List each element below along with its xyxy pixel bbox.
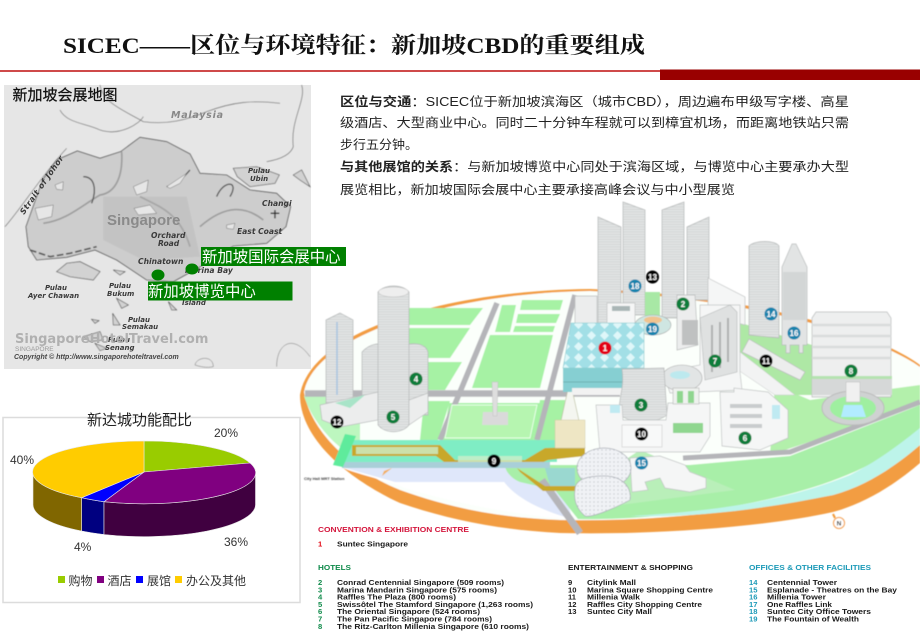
legend: hotels <box>318 563 534 631</box>
map: place names: Ubin <box>250 175 268 183</box>
legend: hotels: Marina Mandarin Singapore (575 rooms) <box>337 586 498 594</box>
marker: Suntec dot <box>186 264 198 274</box>
legend: hotels: 5 <box>318 600 323 609</box>
number markers: 8 <box>849 367 854 376</box>
legend: hotels: 6 <box>318 607 322 616</box>
tower 14 and 16 <box>749 242 807 353</box>
number markers: 16 <box>790 329 799 338</box>
map: place names: Senang <box>105 344 134 352</box>
building 8 <box>812 312 892 425</box>
legend: offices and other facilities: OFFICES & OTHER FACILITIES <box>749 563 871 572</box>
number markers: 11 <box>762 357 771 366</box>
legend: offices and other facilities: 17 <box>749 600 757 609</box>
legend: hotels: 8 <box>318 622 322 631</box>
building 2 and 7 <box>662 295 742 393</box>
data labels <box>10 426 248 554</box>
map: island shapes <box>5 85 310 367</box>
building 1 Suntec <box>563 323 644 395</box>
map: place names: East Coast <box>237 227 283 236</box>
text block: location and relation: 步行五分钟。 <box>340 137 418 152</box>
map: place names: Road <box>158 239 180 248</box>
title: SICEC——区位与环境特征：新加坡CBD的重要组成 <box>63 33 645 58</box>
legend: entertainment and shopping: 13 <box>568 607 576 616</box>
callout: Singapore Expo: 新加坡博览中心 <box>148 282 256 300</box>
legend: hotels: Swissôtel The Stamford Singapore (1,263 rooms) <box>337 600 534 609</box>
3D pie <box>33 441 256 537</box>
legend: hotels: The Ritz-Carlton Millenia Singapore (610 rooms) <box>337 622 530 631</box>
MRT label: City Hall MRT Station <box>304 476 345 481</box>
legend: 展馆 <box>147 573 171 588</box>
map: place names: Chinatown <box>138 257 183 266</box>
number markers <box>330 270 858 470</box>
pyramid glasshouse <box>555 380 585 448</box>
site illustration <box>300 202 920 533</box>
roads <box>305 295 920 533</box>
legend: entertainment and shopping: 12 <box>568 600 576 609</box>
legend: entertainment and shopping: ENTERTAINMENT & SHOPPING <box>568 563 693 572</box>
legend: 办公及其他 <box>186 573 246 588</box>
legend: entertainment and shopping: Citylink Mall <box>587 578 636 587</box>
map: place names: Strait of Johor <box>18 153 66 216</box>
legend: hotels: The Pan Pacific Singapore (784 rooms) <box>337 614 493 624</box>
map: place names: Pulau <box>45 284 67 292</box>
map: place names <box>14 110 292 361</box>
number markers: 19 <box>648 325 657 334</box>
legend: hotels: 7 <box>318 614 322 624</box>
legend: offices and other facilities: Suntec City Office Towers <box>767 607 871 616</box>
number markers: 15 <box>637 459 646 468</box>
number markers: 3 <box>639 401 644 410</box>
legend: offices and other facilities: 18 <box>749 607 757 616</box>
legend <box>58 573 246 588</box>
number markers: 6 <box>743 434 748 443</box>
legend: hotels: Raffles The Plaza (800 rooms) <box>337 592 457 602</box>
number markers: 10 <box>637 430 646 439</box>
map: place names: Pulau <box>108 336 130 344</box>
text block: location and relation <box>340 94 849 197</box>
number markers: 1 <box>603 344 608 353</box>
building 12 <box>320 313 378 427</box>
map: place names: Malaysia <box>171 110 223 121</box>
legend: offices and other facilities: 16 <box>749 592 757 602</box>
number markers: 9 <box>492 457 497 466</box>
legend: convention centre: CONVENTION & EXHIBITION CENTRE <box>318 525 469 534</box>
building 3 <box>619 368 667 422</box>
map: place names: Copyright © http://www.singaporehoteltravel.com <box>14 353 179 361</box>
legend: hotels: HOTELS <box>318 563 351 572</box>
text block: location and relation: 展览相比，新加坡国际会展中心主要承接高峰会议与中小型展览 <box>340 182 735 197</box>
number markers: 18 <box>631 282 640 291</box>
map heading: 新加坡会展地图 <box>12 87 118 104</box>
data labels: 40% <box>10 453 34 467</box>
legend: entertainment and shopping: Raffles City Shopping Centre <box>587 600 702 609</box>
callout: Singapore Expo <box>148 282 292 300</box>
number markers: 5 <box>391 413 396 422</box>
legend: entertainment and shopping: 11 <box>568 592 577 602</box>
building 4 <box>362 344 428 415</box>
panel: Singapore map <box>4 85 346 369</box>
walkway 9 <box>333 434 585 491</box>
legend: hotels: 3 <box>318 586 322 594</box>
legend: offices and other facilities: Centennial Tower <box>767 578 837 587</box>
legend: convention centre <box>318 525 469 548</box>
building 11 <box>738 339 805 395</box>
legend: offices and other facilities: The Fountain of Wealth <box>767 614 859 624</box>
legend: entertainment and shopping: 9 <box>568 578 572 587</box>
map: place names: Pulau <box>128 316 150 324</box>
panel: pie chart <box>3 412 300 602</box>
map: place names: Bukum <box>107 290 134 298</box>
legend: hotels: Conrad Centennial Singapore (509 rooms) <box>337 578 505 587</box>
legend: offices and other facilities: One Raffles Link <box>767 600 833 609</box>
legend: offices and other facilities <box>749 563 898 624</box>
map: place names: SingaporeHotelTravel.com <box>15 332 208 347</box>
number markers: 12 <box>333 418 342 427</box>
map: place names: Semakau <box>122 323 158 331</box>
map: place names: Orchard <box>151 231 186 240</box>
legend: hotels: The Oriental Singapore (524 rooms) <box>337 607 481 616</box>
tower group 18 <box>575 202 745 335</box>
text block: location and relation: 级酒店、大型商业中心。同时二十分钟车程就可以到樟宜机场，而距离地铁站只需 <box>340 115 849 130</box>
north arrow: N <box>837 520 842 528</box>
map: place names: Marina Bay <box>185 266 234 275</box>
legend: convention centre: Suntec Singapore <box>337 540 408 548</box>
legend: entertainment and shopping: Millenia Walk <box>587 592 641 602</box>
text block: location and relation: 区位与交通 ：SICEC位于新加坡滨海区（城市CBD），周边遍布甲级写字楼、高星 <box>340 94 849 109</box>
map: place names: SINGAPORE <box>15 346 54 353</box>
legend: offices and other facilities: Esplanade - Theatres on the Bay <box>767 586 898 594</box>
map: place names: Island <box>182 299 207 307</box>
building 15 Esplanade <box>575 448 706 516</box>
data labels: 4% <box>74 540 92 554</box>
header rule <box>0 70 920 80</box>
legend: entertainment and shopping: Suntec City Mall <box>587 607 652 616</box>
legend: entertainment and shopping: Marina Square Shopping Centre <box>587 586 713 594</box>
legend: entertainment and shopping <box>568 563 713 616</box>
map: place names: Ayer Chawan <box>27 292 79 300</box>
legend: offices and other facilities: 15 <box>749 586 758 594</box>
building 6 <box>720 388 788 450</box>
number markers: 2 <box>681 300 686 309</box>
legend: offices and other facilities: 19 <box>749 614 757 624</box>
number markers: 14 <box>767 310 776 319</box>
number markers: 13 <box>648 273 657 282</box>
number markers: 4 <box>414 375 419 384</box>
legend: 购物 <box>68 573 93 588</box>
legend: convention centre: 1 <box>318 540 323 548</box>
map: place names: Pulau <box>248 167 270 175</box>
monument <box>445 382 537 438</box>
building 5 <box>378 286 428 432</box>
legend: offices and other facilities: 14 <box>749 578 758 587</box>
map: place names: Singapore <box>107 212 180 229</box>
callout: Suntec Singapore: 新加坡国际会展中心 <box>202 248 341 266</box>
marker: Expo dot <box>152 270 164 280</box>
legend: hotels: 2 <box>318 578 322 587</box>
data labels: 20% <box>214 426 238 440</box>
legend: hotels: 4 <box>318 592 323 602</box>
text block: location and relation: 与其他展馆的关系 ：与新加坡博览中心同处于滨海区域，与博览中心主要承办大型 <box>340 159 849 174</box>
number markers: 7 <box>713 357 718 366</box>
data labels: 36% <box>224 535 248 549</box>
legend: entertainment and shopping: 10 <box>568 586 576 594</box>
building 10 <box>596 388 710 452</box>
legend: 酒店 <box>108 574 132 588</box>
north arrow <box>833 514 844 528</box>
map: place names: Pulau <box>109 282 131 290</box>
legend: offices and other facilities: Millenia Tower <box>767 592 826 602</box>
site base disc <box>300 289 920 533</box>
map: place names: Changi <box>262 199 292 208</box>
chart title: 新达城功能配比 <box>87 412 192 429</box>
